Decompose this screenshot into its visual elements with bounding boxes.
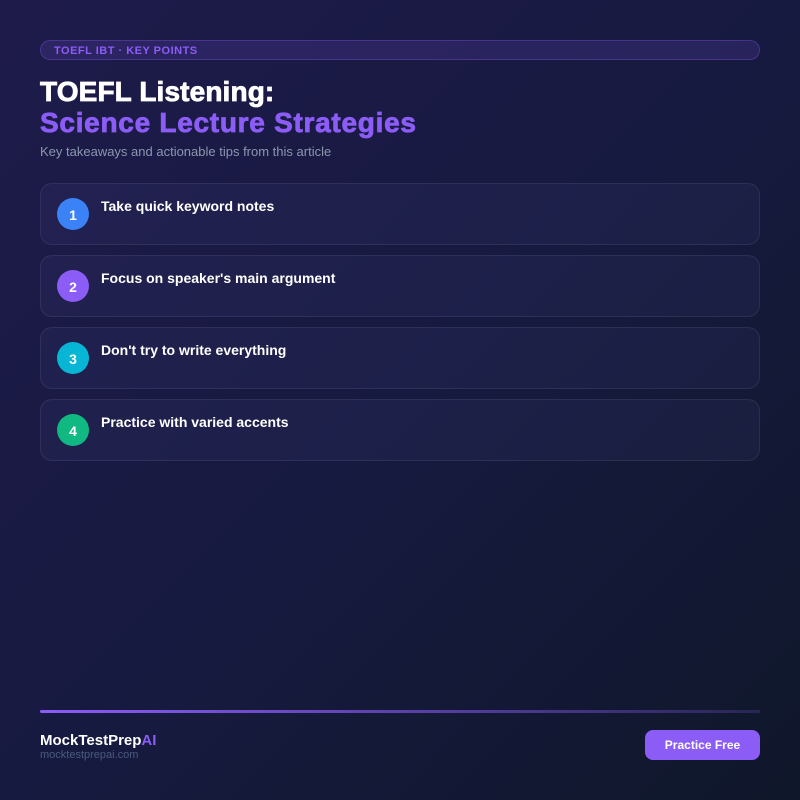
brand name: MockTestPrepAI: [40, 732, 156, 749]
panel: key point 3: [40, 327, 760, 389]
title: TOEFL Listening:: [40, 76, 274, 107]
number badge 3: [57, 342, 89, 374]
title: Science Lecture Strategies: [40, 107, 417, 138]
point text 3: Don't try to write everything: [101, 342, 286, 358]
accent bar: [40, 710, 760, 713]
brand block: [40, 732, 156, 761]
point text 4: Practice with varied accents: [101, 414, 289, 430]
subtitle: Key takeaways and actionable tips from this article: [40, 144, 331, 159]
call to action button: [645, 730, 760, 760]
number badge 2: [57, 270, 89, 302]
number badge 4: 4: [69, 423, 77, 439]
title: [40, 76, 417, 138]
panel: key point 1: [40, 183, 760, 245]
number badge 1: [57, 198, 89, 230]
point text 1: Take quick keyword notes: [101, 198, 274, 214]
badge: [40, 40, 760, 60]
badge: TOEFL IBT · KEY POINTS: [54, 45, 198, 57]
number badge 1: 1: [69, 207, 77, 223]
number badge 3: 3: [69, 351, 77, 367]
brand url: mocktestprepai.com: [40, 749, 138, 761]
call to action button: Practice Free: [665, 738, 740, 752]
panel: key point 4: [40, 399, 760, 461]
panel: key point 2: [40, 255, 760, 317]
point text 2: Focus on speaker's main argument: [101, 270, 335, 286]
number badge 4: [57, 414, 89, 446]
number badge 2: 2: [69, 279, 77, 295]
